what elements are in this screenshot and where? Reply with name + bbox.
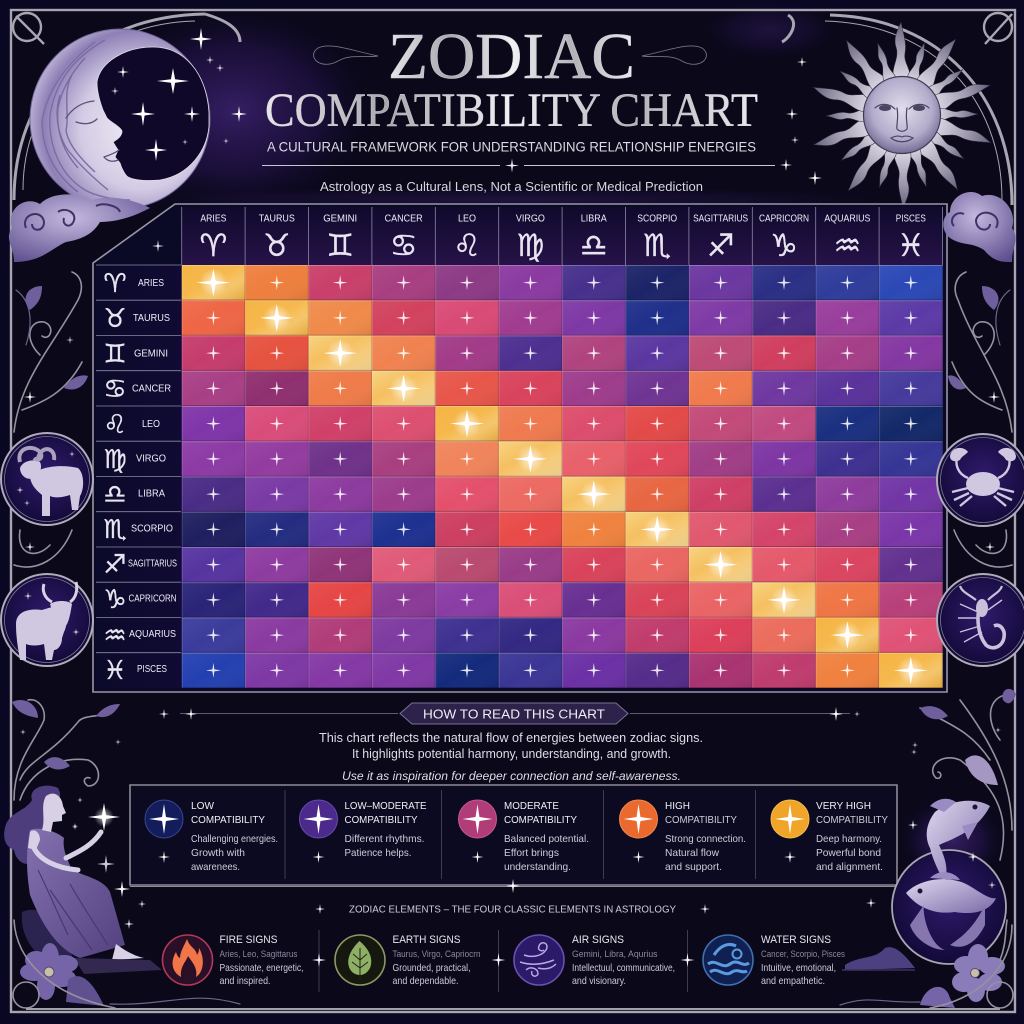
how to read text: This chart reflects the natural flow of energies between zodiac signs.	[319, 730, 703, 745]
element: water	[703, 934, 845, 987]
vines: left side upper	[14, 272, 88, 432]
row labels: ♒︎	[103, 621, 127, 651]
element: fire: Aries, Leo, Sagittarus	[220, 949, 298, 959]
column headers: AQUARIUS	[824, 212, 870, 224]
corner arch: top right	[782, 13, 1012, 205]
cell edge overlay	[182, 265, 943, 688]
element: earth	[335, 934, 480, 987]
sky stars near sun	[780, 57, 822, 185]
row labels: ♋︎	[103, 374, 127, 404]
top fish	[927, 799, 990, 882]
legend: moderate	[458, 800, 589, 873]
title divider	[262, 158, 775, 172]
column headers: ♒︎	[834, 228, 861, 264]
column headers: LIBRA	[581, 212, 607, 224]
legend: low-moderate: COMPATIBILITY	[344, 814, 418, 826]
row labels: ♑︎	[103, 585, 127, 615]
legend: high: HIGH	[665, 800, 690, 812]
row labels: ♊︎	[103, 340, 127, 370]
compatibility chart	[93, 204, 947, 692]
row: Cancer	[182, 371, 943, 406]
element: fire	[162, 934, 304, 987]
element: water: Intuitive, emotional,	[761, 962, 836, 974]
night sky cut-out with face profile	[97, 47, 209, 181]
nebula behind title right	[700, 0, 840, 60]
legend: very high: VERY HIGH	[816, 800, 871, 812]
row labels: LIBRA	[138, 488, 165, 500]
how to read banner	[180, 703, 850, 724]
subtitle: A CULTURAL FRAMEWORK FOR UNDERSTANDING RELATIONSHIP ENERGIES	[267, 138, 756, 154]
column headers: ♎︎	[580, 228, 608, 264]
elements dividers	[312, 930, 694, 992]
row labels: LEO	[142, 418, 160, 430]
purple glow	[900, 795, 1004, 885]
legend: moderate: MODERATE	[504, 800, 559, 812]
column headers: ♓︎	[897, 228, 925, 264]
column headers: ♐︎	[707, 228, 734, 264]
element: air: Gemini, Libra, Aqurius	[572, 949, 658, 959]
moon disk	[30, 29, 210, 209]
legend: very high: COMPATIBILITY	[816, 814, 888, 826]
column headers: ♋︎	[390, 228, 417, 264]
dress folds	[38, 870, 108, 950]
stone platform	[74, 958, 162, 974]
row labels: ♎︎	[103, 480, 127, 510]
row labels: CAPRICORN	[128, 592, 176, 604]
legend: high: Natural flow	[665, 847, 719, 859]
vines: right side middle	[954, 530, 1012, 567]
legend: very high	[771, 800, 888, 873]
crescent moon	[30, 28, 247, 209]
fish ring	[892, 850, 1006, 964]
legend: very high: Deep harmony.	[816, 833, 882, 845]
legend: moderate: understanding.	[504, 861, 571, 873]
bottom fish	[906, 872, 996, 950]
row: Capricorn	[182, 582, 943, 618]
column headers: LEO	[458, 212, 476, 224]
row: Scorpio	[182, 512, 943, 547]
column headers: GEMINI	[323, 212, 357, 224]
element: air: AIR SIGNS	[572, 934, 624, 946]
legend: very high: and alignment.	[816, 861, 883, 873]
column headers: ♑︎	[770, 228, 798, 264]
seat swirl	[22, 910, 74, 960]
row label band	[96, 265, 182, 688]
face and skin	[28, 794, 144, 960]
corner arch: top left	[13, 13, 240, 200]
row labels: ♏︎	[103, 515, 127, 545]
row: Sagittarius	[182, 547, 943, 582]
column headers: ARIES	[200, 212, 226, 224]
row labels: VIRGO	[136, 452, 166, 464]
corner star	[152, 240, 164, 252]
row labels: ♉︎	[103, 304, 127, 334]
sun	[780, 22, 993, 208]
column header band	[182, 207, 943, 265]
cloud swirl: top right	[943, 192, 1016, 262]
ornamental bottom line	[26, 1008, 1000, 1010]
vines: lower left	[12, 700, 121, 829]
column headers: SCORPIO	[637, 212, 677, 224]
row: Libra	[182, 476, 943, 512]
vines: left side middle	[14, 530, 72, 567]
element: air: Intellectuul, communicative,	[572, 962, 675, 974]
column headers: ♉︎	[263, 228, 291, 264]
flower: bottom left	[13, 920, 240, 1008]
row labels: AQUARIUS	[129, 628, 176, 640]
crab figure	[966, 472, 1000, 496]
element: air: and visionary.	[572, 975, 626, 987]
column headers: CAPRICORN	[759, 212, 809, 224]
legend: moderate: Balanced potential.	[504, 833, 589, 845]
legend: low-moderate: Patience helps.	[344, 847, 412, 859]
how to read text: Use it as inspiration for deeper connection and self-awareness.	[342, 769, 681, 783]
element: earth: Grounded, practical,	[392, 962, 470, 974]
legend: low	[145, 800, 278, 873]
row labels: ♌︎	[103, 410, 127, 440]
woman with star	[4, 786, 162, 974]
legend: very high: Powerful bond	[816, 847, 881, 859]
title flourish left	[314, 46, 378, 64]
row labels: SAGITTARIUS	[128, 558, 177, 570]
vines: right side upper	[948, 272, 1012, 432]
column headers: ♈︎	[200, 228, 227, 264]
legend panel	[130, 785, 897, 893]
legend: low-moderate: LOW–MODERATE	[344, 800, 426, 812]
fish medallion stars	[908, 820, 996, 889]
row labels: TAURUS	[133, 312, 170, 324]
disclaimer: Astrology as a Cultural Lens, Not a Scientific or Medical Prediction	[320, 179, 703, 194]
legend: low-moderate	[300, 800, 426, 863]
sun face	[864, 76, 940, 154]
row labels: ♓︎	[103, 656, 127, 686]
medallion: scorpion	[937, 574, 1024, 666]
held star	[72, 803, 146, 929]
legend: high: Strong connection.	[665, 833, 746, 845]
row: Virgo	[182, 441, 943, 477]
scattered sparkles	[159, 707, 918, 908]
pisces fish medallion	[892, 795, 1006, 964]
how to read text	[319, 730, 703, 783]
legend: high: COMPATIBILITY	[665, 814, 737, 826]
element: earth: Taurus, Virgo, Capriocrn	[392, 949, 480, 959]
legend: moderate: COMPATIBILITY	[504, 814, 577, 826]
table top glow	[92, 186, 932, 214]
legend: low: Growth with	[191, 847, 245, 859]
legend: moderate: Effort brings	[504, 847, 559, 859]
row labels: ♐︎	[103, 550, 127, 580]
row labels: SCORPIO	[131, 522, 173, 534]
legend: high: and support.	[665, 861, 722, 873]
moon hair	[42, 40, 130, 200]
row: Taurus	[182, 300, 943, 336]
header and row separators	[96, 207, 942, 653]
column headers: SAGITTARIUS	[693, 212, 748, 224]
element: water: and empathetic.	[761, 975, 825, 987]
legend: low-moderate: Different rhythms.	[344, 833, 424, 845]
element: fire: and inspired.	[220, 975, 270, 987]
row labels: GEMINI	[134, 348, 168, 360]
flower and clouds: bottom right	[840, 920, 1013, 1008]
column headers: ♌︎	[453, 228, 481, 264]
cloud swirl: top left	[9, 194, 150, 262]
legend: low: COMPATIBILITY	[191, 814, 265, 826]
column headers	[200, 212, 926, 264]
element: fire: FIRE SIGNS	[220, 934, 278, 946]
column headers: CANCER	[385, 212, 423, 224]
scorpion figure	[958, 586, 1004, 648]
column headers: TAURUS	[259, 212, 295, 224]
bull figure	[16, 601, 72, 660]
ram figure	[20, 460, 83, 516]
element: air	[514, 934, 675, 987]
row: Aries	[182, 265, 943, 300]
dress	[27, 829, 125, 958]
moon stars	[111, 28, 247, 161]
title flourish right	[642, 46, 706, 64]
title line 2: COMPATIBILITY CHART	[265, 84, 758, 137]
element: water: Cancer, Scorpio, Pisces	[761, 949, 845, 959]
diagonal highlight stars	[196, 269, 928, 684]
title	[265, 20, 758, 137]
row labels: CANCER	[132, 382, 171, 394]
sun rays	[811, 22, 993, 208]
legend: high	[620, 800, 746, 873]
medallion: bull	[1, 574, 93, 666]
arms	[34, 832, 101, 870]
legend: low: Challenging energies.	[191, 833, 278, 845]
vines: lower right	[911, 689, 1016, 860]
column headers: ♊︎	[326, 228, 354, 264]
row labels	[103, 269, 177, 686]
how to read text: It highlights potential harmony, understanding, and growth.	[352, 746, 671, 761]
element: fire: Passionate, energetic,	[220, 962, 304, 974]
row labels: ♈︎	[103, 269, 127, 299]
medallion: crab	[937, 434, 1024, 526]
chart frame	[93, 204, 947, 692]
row: Gemini	[182, 336, 943, 371]
column headers: VIRGO	[516, 212, 545, 224]
column headers: ♍︎	[517, 228, 544, 264]
hair	[4, 786, 60, 864]
row: Aquarius	[182, 618, 943, 653]
column headers: PISCES	[896, 212, 926, 224]
moon face details	[66, 101, 119, 161]
medallion: ram	[1, 433, 93, 525]
column headers: ♏︎	[643, 228, 671, 264]
elements heading: ZODIAC ELEMENTS – THE FOUR CLASSIC ELEMENTS IN ASTROLOGY	[349, 904, 676, 916]
row labels: PISCES	[137, 663, 167, 675]
row: Pisces	[182, 653, 943, 688]
legend: low: LOW	[191, 800, 214, 812]
element: water: WATER SIGNS	[761, 934, 831, 946]
upper nebula glow	[95, 5, 375, 215]
legend: low: awarenees.	[191, 861, 240, 873]
title line 1: ZODIAC	[388, 20, 635, 93]
row: Leo	[182, 406, 943, 441]
element: earth: and dependable.	[392, 975, 458, 987]
how to read banner: HOW TO READ THIS CHART	[423, 706, 605, 722]
row labels: ♍︎	[103, 445, 127, 475]
row labels: ARIES	[138, 277, 164, 289]
element: earth: EARTH SIGNS	[392, 934, 460, 946]
